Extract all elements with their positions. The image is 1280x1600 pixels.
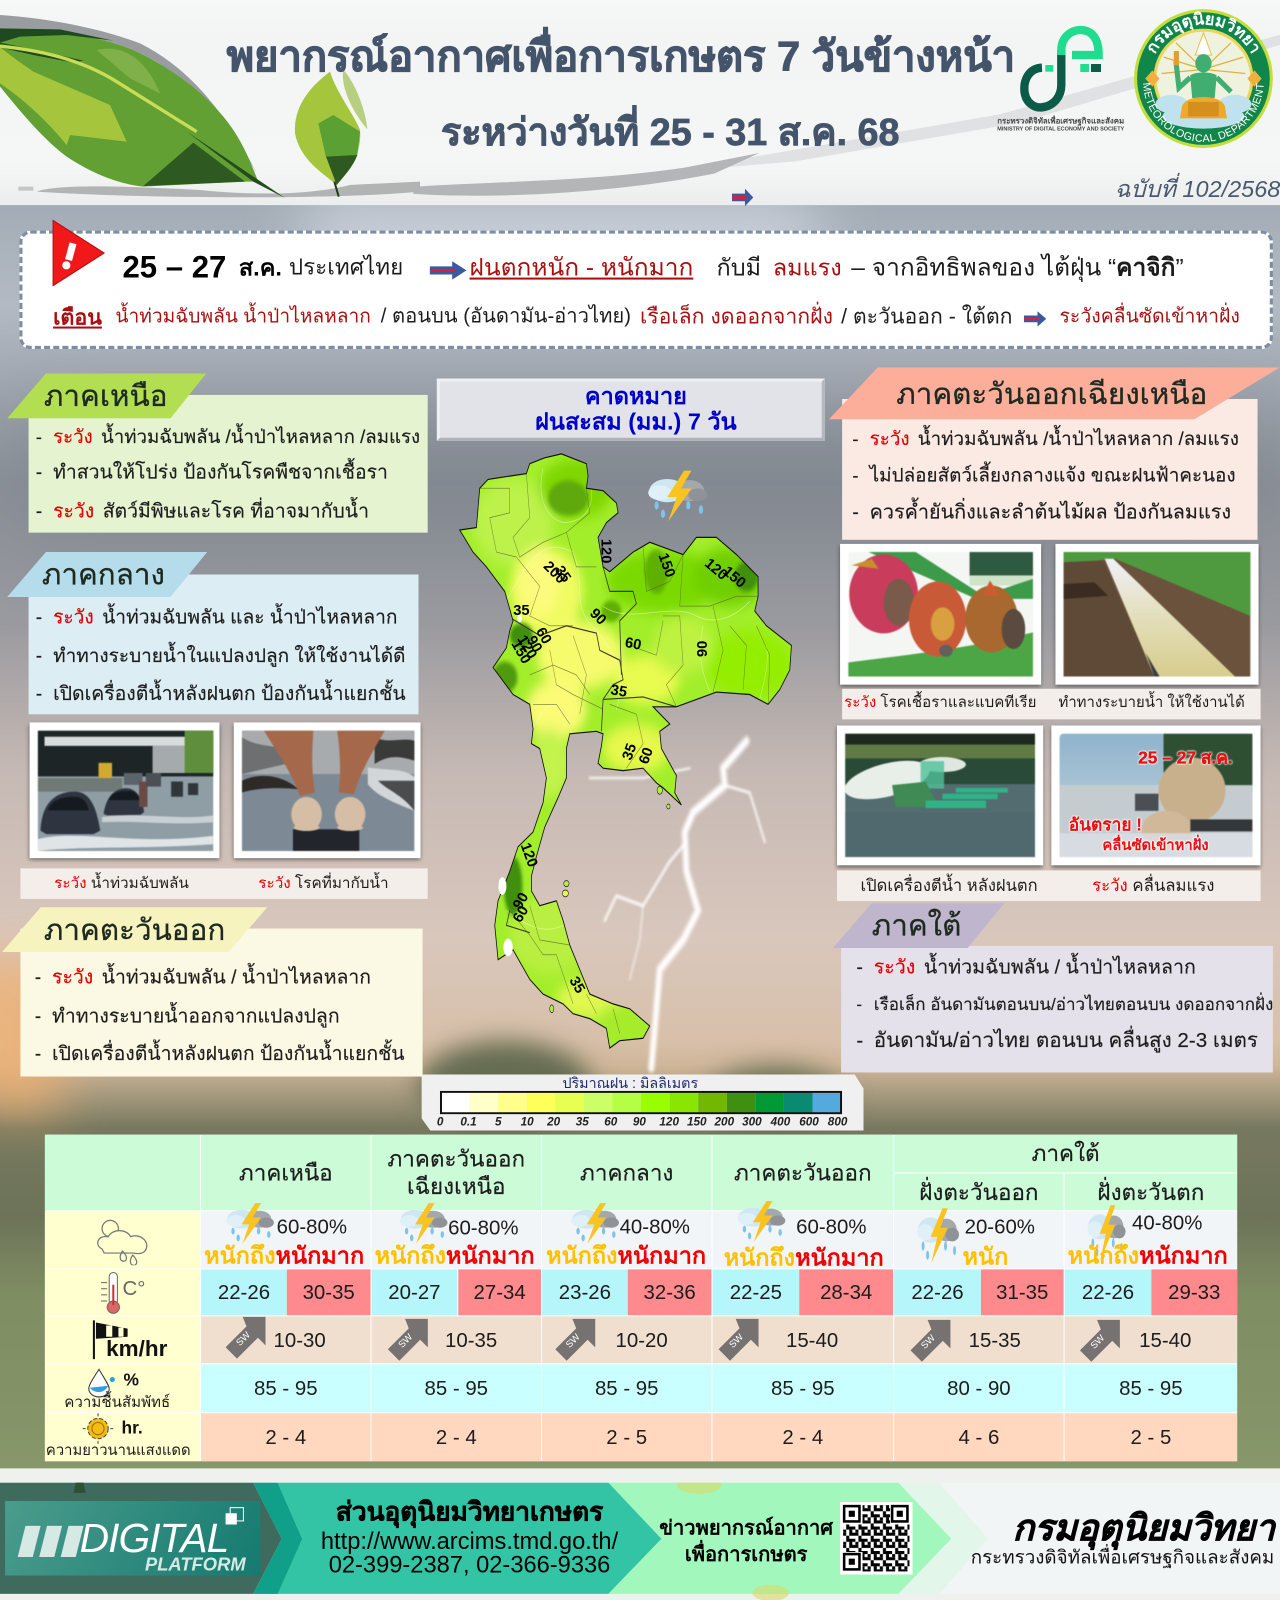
row: rain: หนักถึงหนักมาก — [204, 1242, 364, 1268]
row: rain: 40-80% — [620, 1216, 690, 1239]
header art: leaves — [0, 15, 420, 198]
panel: east — [20, 929, 423, 1077]
row: temperature: 22-26 — [218, 1281, 270, 1304]
warning banner — [19, 231, 1273, 349]
label: relative humidity: % — [124, 1370, 139, 1390]
legend: rainfall scale: 35 — [576, 1116, 589, 1129]
row: rain: หนักถึงหนักมาก — [375, 1242, 535, 1268]
east line 1: - — [35, 967, 41, 989]
caption strip: northeast photos: ระวัง โรคเชื้อราและแบคทีเรีย — [844, 695, 1036, 711]
logo: digital economy ministry: กระทรวงดิจิทัลเพื่อเศรษฐกิจและสังคม — [997, 116, 1124, 126]
row: rain: หนักถึงหนักมาก — [546, 1242, 706, 1268]
north line 1: - — [36, 426, 42, 447]
legend: rainfall scale: 600 — [799, 1116, 819, 1129]
banner line 2: / ตะวันออก - ใต้ตก — [841, 305, 1013, 329]
contact block — [321, 1498, 618, 1578]
table header row: ฝั่งตะวันออก — [919, 1179, 1039, 1205]
legend: rainfall scale: 5 — [495, 1116, 502, 1129]
photo: feet in water — [234, 722, 421, 858]
north line 1: ระวัง น้ำท่วมฉับพลัน /น้ำป่าไหลหลาก /ลมแรง — [53, 426, 420, 447]
map title: คาดหมาย — [585, 383, 687, 409]
agri news label: ข่าวพยากรณ์อากาศ — [659, 1517, 833, 1540]
caption strip: central photos — [20, 868, 428, 899]
south line 1: ระวัง น้ำท่วมฉับพลัน / น้ำป่าไหลหลาก — [874, 957, 1196, 979]
photo: storm waves: อันตราย ! — [1069, 815, 1142, 835]
header swoosh — [413, 35, 1280, 196]
south line 2: - — [856, 995, 862, 1014]
logo: meteorological department seal: กรมอุตุนิยมวิทยา — [1148, 11, 1258, 54]
map: Thailand rainfall: 150 — [508, 637, 534, 666]
legend: rainfall scale: 60 — [604, 1116, 617, 1129]
row: temperature: 28-34 — [820, 1281, 872, 1304]
row: sunshine: 4 - 6 — [958, 1426, 999, 1448]
map: Thailand rainfall: 150 — [720, 563, 749, 591]
legend: rainfall scale: 300 — [742, 1116, 762, 1129]
row: sunshine: 2 - 5 — [1130, 1426, 1171, 1448]
map: Thailand rainfall: 60 — [637, 745, 657, 766]
banner line 1: ฝนตกหนัก - หนักมาก — [470, 254, 693, 282]
contact block: ส่วนอุตุนิยมวิทยาเกษตร — [336, 1498, 603, 1527]
northeast line 1: - — [852, 428, 859, 449]
row: rain — [44, 1201, 1238, 1270]
row: humidity: 85 - 95 — [595, 1377, 658, 1399]
icon: thermometer — [45, 1269, 200, 1315]
small arrow icon — [732, 189, 754, 206]
heading: east — [2, 907, 268, 952]
row: sunshine: 2 - 4 — [782, 1426, 823, 1448]
east line 3: เปิดเครื่องตีน้ำหลังฝนตก ป้องกันน้ำแยกชั้น — [52, 1044, 405, 1065]
map: Thailand rainfall: 35 — [551, 563, 574, 585]
agri news label: เพื่อการเกษตร — [685, 1544, 807, 1566]
row: sunshine: 2 - 5 — [606, 1426, 647, 1448]
table header row: ภาคตะวันออก — [387, 1146, 525, 1171]
map: Thailand rainfall: 90 — [586, 605, 609, 628]
south line 1: - — [856, 957, 863, 979]
icon: storm cloud — [648, 470, 707, 521]
caption strip: aerator and waves: ระวัง คลื่นลมแรง — [1092, 877, 1214, 895]
heading: east: ภาคตะวันออก — [44, 914, 225, 947]
icon: partly cloudy rain — [45, 1211, 200, 1268]
heading: northeast: ภาคตะวันออกเฉียงเหนือ — [896, 379, 1207, 411]
logo: digital economy ministry: MINISTRY OF DIGITAL ECONOMY AND SOCIETY — [997, 127, 1124, 133]
banner line 1 — [122, 250, 1184, 285]
heading: central — [7, 552, 207, 597]
row: rain: 60-80% — [796, 1216, 867, 1239]
row: humidity — [44, 1364, 1238, 1412]
heading: south: ภาคใต้ — [872, 910, 961, 943]
caption strip: aerator and waves — [837, 870, 1261, 901]
digital platform logo: ▮▮▮DIGITAL — [15, 1516, 228, 1561]
banner line 1: – จากอิทธิพลของ ไต้ฝุ่น “คาจิกิ” — [851, 254, 1184, 282]
row: rain: หนัก — [963, 1243, 1008, 1269]
row: temperature: 30-35 — [303, 1281, 355, 1304]
map: Thailand rainfall: 200 — [540, 558, 569, 587]
row: temperature: 27-34 — [474, 1281, 526, 1304]
title: พยากรณ์อากาศเพื่อการเกษตร 7 วันข้างหน้า — [227, 33, 1015, 80]
row: temperature: 23-26 — [559, 1281, 611, 1304]
legend: rainfall scale: 0.1 — [460, 1116, 477, 1129]
row: temperature: 22-26 — [911, 1281, 964, 1304]
legend: rainfall scale: ปริมาณฝน : มิลลิเมตร — [562, 1074, 698, 1091]
table header row: เฉียงเหนือ — [407, 1173, 505, 1199]
row: humidity: 85 - 95 — [424, 1377, 488, 1399]
label: sunshine duration: hr. — [121, 1418, 143, 1438]
banner line 1: ส.ค. — [239, 254, 282, 281]
row: rain: 20-60% — [965, 1216, 1035, 1239]
footer — [0, 1468, 1280, 1600]
table header row: ภาคตะวันออก — [734, 1160, 872, 1185]
table header row: ภาคกลาง — [580, 1160, 673, 1185]
north line 2: - — [36, 462, 42, 484]
central line 3: เปิดเครื่องตีน้ำหลังฝนตก ป้องกันน้ำแยกชั้น — [53, 684, 406, 705]
row: temperature — [44, 1269, 1238, 1316]
heading: south — [833, 903, 1004, 948]
row: sunshine — [44, 1413, 1238, 1462]
contact block: 02-399-2387, 02-366-9336 — [329, 1551, 610, 1578]
digital platform logo — [5, 1501, 260, 1576]
row: humidity: 80 - 90 — [947, 1377, 1011, 1399]
row: humidity: 85 - 95 — [1119, 1377, 1183, 1399]
map: Thailand rainfall: 150 — [655, 551, 678, 579]
map: Thailand rainfall: 35 — [566, 974, 588, 996]
banner line 1: 25 – 27 — [122, 250, 226, 285]
legend: rainfall scale: 200 — [715, 1116, 734, 1129]
date range: ระหว่างวันที่ 25 - 31 ส.ค. 68 — [441, 111, 900, 153]
logo: meteorological department seal: METEOROLOGICAL DEPARTMENT — [1143, 82, 1264, 142]
east line 3: - — [35, 1044, 41, 1065]
banner line 2 — [53, 302, 1240, 330]
row: wind: 15-40 — [786, 1330, 838, 1352]
background: stormy sky — [0, 204, 1280, 1469]
row: sunshine: 2 - 4 — [265, 1426, 306, 1448]
ministry name: กระทรวงดิจิทัลเพื่อเศรษฐกิจและสังคม — [971, 1546, 1274, 1567]
map: Thailand rainfall: 60 — [532, 625, 555, 647]
map: Thailand rainfall: 90 — [695, 640, 711, 657]
label: sunshine duration — [45, 1413, 200, 1461]
central line 3: - — [36, 684, 42, 705]
caption strip: aerator and waves: เปิดเครื่องตีน้ำ หลังฝนตก — [860, 877, 1038, 895]
caption strip: northeast photos: ทำทางระบายน้ำ ให้ใช้งานได้ — [1058, 695, 1245, 711]
row: wind: 10-35 — [445, 1330, 497, 1352]
map: Thailand rainfall: 60 — [624, 635, 643, 653]
heading: north: ภาคเหนือ — [44, 381, 167, 413]
northeast line 3: ควรค้ำยันกิ่งและลำต้นไม้ผล ป้องกันลมแรง — [870, 501, 1231, 523]
south line 2: เรือเล็ก อันดามันตอนบน/อ่าวไทยตอนบน งดออกจากฝั่ง — [874, 995, 1273, 1014]
banner line 2: ระวังคลื่นซัดเข้าหาฝั่ง — [1060, 306, 1240, 328]
row: temperature: 20-27 — [388, 1281, 441, 1304]
agri news label — [659, 1516, 834, 1566]
map: Thailand rainfall: 90 — [523, 633, 545, 655]
table header row — [44, 1134, 1238, 1210]
central line 2: ทำทางระบายน้ำในแปลงปลูก ให้ใช้งานได้ดี — [53, 645, 405, 666]
legend: rainfall scale: 20 — [547, 1116, 560, 1129]
legend: rainfall scale: 10 — [521, 1116, 534, 1129]
caption strip: central photos: ระวัง น้ำท่วมฉับพลัน — [54, 874, 189, 892]
row: humidity: 85 - 95 — [771, 1377, 835, 1399]
south line 3: อันดามัน/อ่าวไทย ตอนบน คลื่นสูง 2-3 เมตร — [874, 1030, 1258, 1052]
label: sunshine duration: ความยาวนานแสงแดด — [46, 1443, 191, 1459]
caption strip: northeast photos — [842, 689, 1261, 719]
legend: rainfall scale: 150 — [687, 1116, 707, 1129]
table header row: ภาคใต้ — [1032, 1141, 1100, 1166]
logo: digital economy ministry — [997, 26, 1124, 133]
row: rain: 60-80% — [277, 1216, 347, 1239]
photo: storm waves: คลื่นซัดเข้าหาฝั่ง — [1102, 838, 1209, 854]
map: Thailand rainfall: 35 — [620, 741, 641, 762]
table header row: ภาคเหนือ — [239, 1160, 333, 1185]
south line 3: - — [856, 1030, 863, 1052]
map title: ฝนสะสม (มม.) 7 วัน — [535, 408, 737, 435]
footer chevron band — [0, 1482, 988, 1600]
north line 2: ทำสวนให้โปร่ง ป้องกันโรคพืชจากเชื้อรา — [53, 462, 388, 484]
heading: central: ภาคกลาง — [42, 559, 165, 592]
panel: south — [841, 946, 1273, 1072]
label: relative humidity — [45, 1364, 200, 1412]
map: Thailand rainfall: 35 — [514, 603, 530, 619]
east line 2: ทำทางระบายน้ำออกจากแปลงปลูก — [52, 1006, 340, 1028]
legend: rainfall scale: 800 — [828, 1116, 847, 1129]
photo: storm waves: 25 – 27 ส.ค. — [1138, 748, 1233, 767]
north line 3: - — [36, 501, 42, 522]
heading: north — [7, 374, 206, 418]
banner line 1: ประเทศไทย — [289, 254, 403, 280]
forecast table — [45, 1135, 1237, 1461]
east line 1: ระวัง น้ำท่วมฉับพลัน / น้ำป่าไหลหลาก — [52, 967, 371, 989]
northeast line 2: ไม่ปล่อยสัตว์เลี้ยงกลางแจ้ง ขณะฝนฟ้าคะนอง — [870, 464, 1236, 486]
northeast line 1: ระวัง น้ำท่วมฉับพลัน /น้ำป่าไหลหลาก /ลมแรง — [870, 428, 1239, 449]
map: Thailand rainfall: 120 — [598, 538, 614, 563]
northeast line 3: - — [852, 501, 859, 523]
banner line 2: เรือเล็ก งดออกจากฝั่ง — [640, 305, 833, 329]
row: temperature: 22-25 — [730, 1281, 782, 1304]
row: temperature: 32-36 — [643, 1281, 696, 1304]
table header row: ฝั่งตะวันตก — [1097, 1179, 1204, 1205]
photo: storm waves — [1051, 726, 1261, 865]
issue number: ฉบับที่ 102/2568 — [1115, 176, 1280, 202]
central line 2: - — [36, 645, 42, 666]
central line 1: - — [36, 606, 42, 628]
QR code — [840, 1502, 912, 1574]
map title — [437, 379, 825, 441]
legend: rainfall scale: 0 — [437, 1116, 443, 1129]
lightning bolt — [588, 734, 767, 1074]
map: Thailand rainfall: 120 — [514, 632, 540, 662]
icon: thermometer: C° — [122, 1277, 145, 1299]
banner line 1: กับมี — [717, 254, 761, 281]
panel: northeast — [842, 399, 1258, 540]
map: Thailand rainfall: 60 — [511, 903, 533, 925]
map: Thailand rainfall — [459, 453, 792, 1049]
icon: warning triangle — [52, 220, 105, 287]
legend: rainfall scale: 400 — [771, 1116, 790, 1129]
label: wind speed: km/hr — [106, 1336, 167, 1361]
label: wind speed — [45, 1316, 200, 1363]
map: Thailand rainfall: 120 — [701, 555, 730, 583]
banner line 1: ลมแรง — [773, 254, 842, 281]
row: rain: 40-80% — [1132, 1212, 1202, 1235]
header band — [0, 0, 1280, 205]
panel: north — [29, 395, 428, 533]
photo: diseased dragon fruit — [840, 544, 1041, 685]
row: wind: 10-20 — [616, 1330, 668, 1352]
north line 3: ระวัง สัตว์มีพิษและโรค ที่อาจมากับน้ำ — [53, 501, 369, 522]
banner line 2: เตือน — [53, 306, 102, 330]
row: wind — [44, 1316, 1238, 1364]
department name: กรมอุตุนิยมวิทยา — [1013, 1508, 1275, 1548]
legend: rainfall scale: 90 — [633, 1116, 646, 1129]
row: rain: 60-80% — [448, 1217, 518, 1240]
banner line 2: น้ำท่วมฉับพลัน น้ำป่าไหลหลาก — [115, 305, 371, 327]
central line 1: ระวัง น้ำท่วมฉับพลัน และ น้ำป่าไหลหลาก — [53, 606, 397, 628]
legend: rainfall scale: 120 — [659, 1116, 679, 1129]
row: wind: 10-30 — [274, 1330, 326, 1352]
map: Thailand rainfall: 90 — [511, 890, 533, 912]
row: temperature: 29-33 — [1168, 1281, 1220, 1304]
row: temperature: 31-35 — [996, 1281, 1048, 1304]
row: temperature: 22-26 — [1082, 1281, 1134, 1304]
panel: central — [29, 574, 418, 714]
legend: rainfall scale — [422, 1074, 864, 1131]
row: sunshine: 2 - 4 — [436, 1426, 477, 1448]
row: rain: หนักถึงหนักมาก — [1068, 1242, 1228, 1268]
row: wind: 15-40 — [1139, 1330, 1191, 1352]
northeast line 2: - — [852, 464, 859, 486]
banner line 2: / ตอนบน (อันดามัน-อ่าวไทย) — [381, 305, 631, 328]
photo: flooded road — [30, 722, 219, 858]
label: relative humidity: ความชื้นสัมพัทธ์ — [64, 1395, 170, 1411]
caption strip: central photos: ระวัง โรคที่มากับน้ำ — [258, 874, 389, 892]
row: rain: หนักถึงหนักมาก — [724, 1244, 884, 1270]
row: humidity: 85 - 95 — [254, 1377, 318, 1399]
map: Thailand rainfall: 35 — [610, 682, 629, 700]
east line 2: - — [35, 1006, 41, 1028]
photo: water aerator — [837, 726, 1043, 865]
logo: meteorological department seal — [1134, 9, 1273, 148]
heading: northeast — [829, 368, 1280, 420]
digital platform logo: PLATFORM — [145, 1554, 246, 1574]
photo: drainage ditch — [1055, 544, 1259, 685]
map: Thailand rainfall: 120 — [517, 840, 540, 869]
row: wind: 15-35 — [969, 1330, 1021, 1352]
contact block: http://www.arcims.tmd.go.th/ — [321, 1528, 618, 1554]
